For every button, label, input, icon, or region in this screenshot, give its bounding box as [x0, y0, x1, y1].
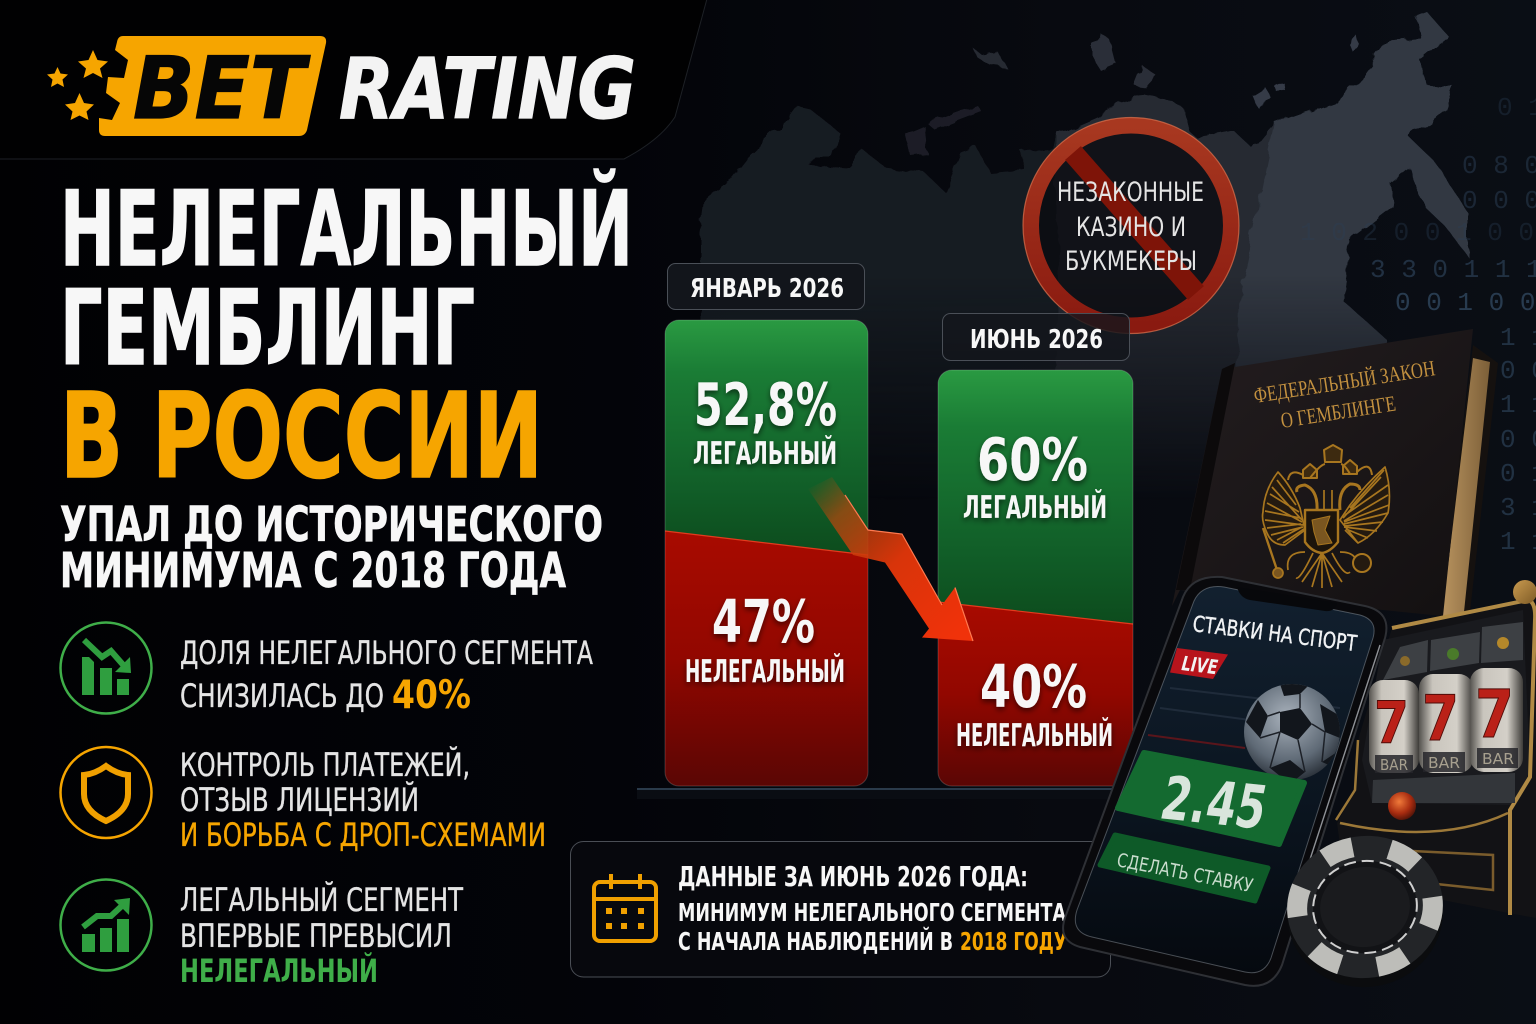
text: illegal share: СНИЗИЛАСЬ ДО — [180, 677, 384, 715]
book title: ФЕДЕРАЛЬНЫЙ ЗАКОН — [1252, 355, 1437, 408]
text: legal segment: НЕЛЕГАЛЬНЫЙ — [180, 952, 378, 990]
phone heading: СТАВКИ НА СПОРТ — [1191, 612, 1359, 657]
callout text — [678, 860, 1067, 956]
map of Russia — [698, 12, 1470, 444]
logo — [47, 36, 636, 139]
text: payment control — [180, 746, 546, 854]
live badge — [1170, 648, 1228, 679]
arrow: down trend — [808, 477, 973, 641]
January illegal value: 47% — [712, 587, 815, 656]
label: January 2026 — [668, 264, 864, 310]
text: legal segment: ВПЕРВЫЕ ПРЕВЫСИЛ — [180, 917, 452, 955]
June illegal value: НЕЛЕГАЛЬНЫЙ — [956, 718, 1113, 754]
reels: BAR — [1428, 754, 1460, 772]
callout text: С НАЧАЛА НАБЛЮДЕНИЙ В — [678, 927, 953, 956]
logo BET: BET — [133, 39, 311, 139]
icon: calendar — [594, 874, 656, 941]
slot machine — [1336, 580, 1536, 918]
reels: BAR — [1380, 756, 1408, 774]
callout text: МИНИМУМ НЕЛЕГАЛЬНОГО СЕГМЕНТА — [678, 898, 1066, 927]
June legal value — [963, 425, 1107, 526]
bar: June 2026 — [938, 370, 1133, 786]
title — [60, 169, 633, 505]
text: payment control: КОНТРОЛЬ ПЛАТЕЖЕЙ, — [180, 746, 470, 784]
text: legal segment — [180, 881, 463, 990]
odds panel — [1118, 753, 1304, 844]
coat of arms — [1262, 445, 1389, 588]
June legal value: ЛЕГАЛЬНЫЙ — [963, 490, 1107, 526]
reels: 7 — [1475, 676, 1514, 753]
June illegal value — [956, 652, 1113, 754]
reels — [1369, 668, 1523, 774]
book title — [1252, 355, 1437, 433]
faded score rows — [1148, 688, 1340, 748]
text: payment control: И БОРЬБА С ДРОП-СХЕМАМИ — [180, 816, 546, 854]
sign text — [1057, 177, 1204, 277]
sign text: КАЗИНО И — [1076, 212, 1186, 243]
January illegal value — [685, 587, 845, 690]
label: June 2026 — [942, 314, 1130, 360]
June legal value: 60% — [977, 425, 1088, 494]
label: January 2026: ЯНВАРЬ 2026 — [690, 274, 844, 304]
bet button: СДЕЛАТЬ СТАВКУ — [1115, 849, 1255, 897]
label: June 2026: ИЮНЬ 2026 — [970, 325, 1103, 355]
callout text: 2018 ГОДУ — [960, 927, 1067, 956]
book title: О ГЕМБЛИНГЕ — [1279, 390, 1397, 433]
logo stars — [47, 50, 108, 120]
logo badge — [99, 36, 326, 136]
text: illegal share: ДОЛЯ НЕЛЕГАЛЬНОГО СЕГМЕНТА — [180, 634, 593, 672]
icon: growing bars — [60, 880, 152, 970]
subtitle: УПАЛ ДО ИСТОРИЧЕСКОГО — [60, 497, 603, 553]
red knob — [1388, 792, 1416, 820]
upper symbol row — [1383, 622, 1523, 680]
live badge: LIVE — [1180, 651, 1219, 679]
chart shelf — [637, 788, 1117, 799]
reels: BAR — [1482, 750, 1514, 768]
soccer ball — [1244, 684, 1340, 784]
icon: shield — [60, 747, 152, 838]
June illegal value: 40% — [980, 652, 1087, 721]
binary data pattern — [1300, 93, 1536, 557]
subtitle: МИНИМУМА С 2018 ГОДА — [60, 543, 566, 599]
January legal value: ЛЕГАЛЬНЫЙ — [693, 436, 837, 472]
sign text: НЕЗАКОННЫЕ — [1057, 177, 1204, 208]
callout: June 2026 data — [570, 842, 1110, 977]
bet button — [1100, 835, 1268, 901]
book: federal law — [1172, 329, 1498, 618]
poker chip — [1277, 826, 1453, 997]
header panel — [0, 0, 708, 159]
phone: sports betting app — [1063, 577, 1386, 986]
text: illegal share — [180, 634, 593, 718]
title: НЕЛЕГАЛЬНЫЙ — [60, 169, 633, 290]
odds panel: 2.45 — [1155, 764, 1273, 844]
callout text: ДАННЫЕ ЗА ИЮНЬ 2026 ГОДА: — [678, 860, 1028, 893]
icon: declining bars — [60, 622, 152, 714]
reels: 7 — [1422, 682, 1459, 755]
title: ГЕМБЛИНГ — [60, 269, 475, 389]
sign text: БУКМЕКЕРЫ — [1065, 246, 1197, 277]
bar: January 2026 — [665, 320, 868, 786]
subtitle — [60, 497, 603, 599]
lower panel — [1372, 773, 1515, 803]
text: illegal share: 40% — [392, 673, 471, 718]
January illegal value: НЕЛЕГАЛЬНЫЙ — [685, 654, 845, 690]
text: payment control: ОТЗЫВ ЛИЦЕНЗИЙ — [180, 781, 419, 819]
prohibition sign — [1023, 118, 1239, 334]
January legal value: 52,8% — [694, 370, 837, 439]
logo RATING: RATING — [339, 40, 636, 138]
reels: 7 — [1374, 689, 1409, 757]
text: legal segment: ЛЕГАЛЬНЫЙ СЕГМЕНТ — [180, 881, 463, 919]
title: В РОССИИ — [60, 367, 543, 505]
January legal value — [693, 370, 837, 472]
